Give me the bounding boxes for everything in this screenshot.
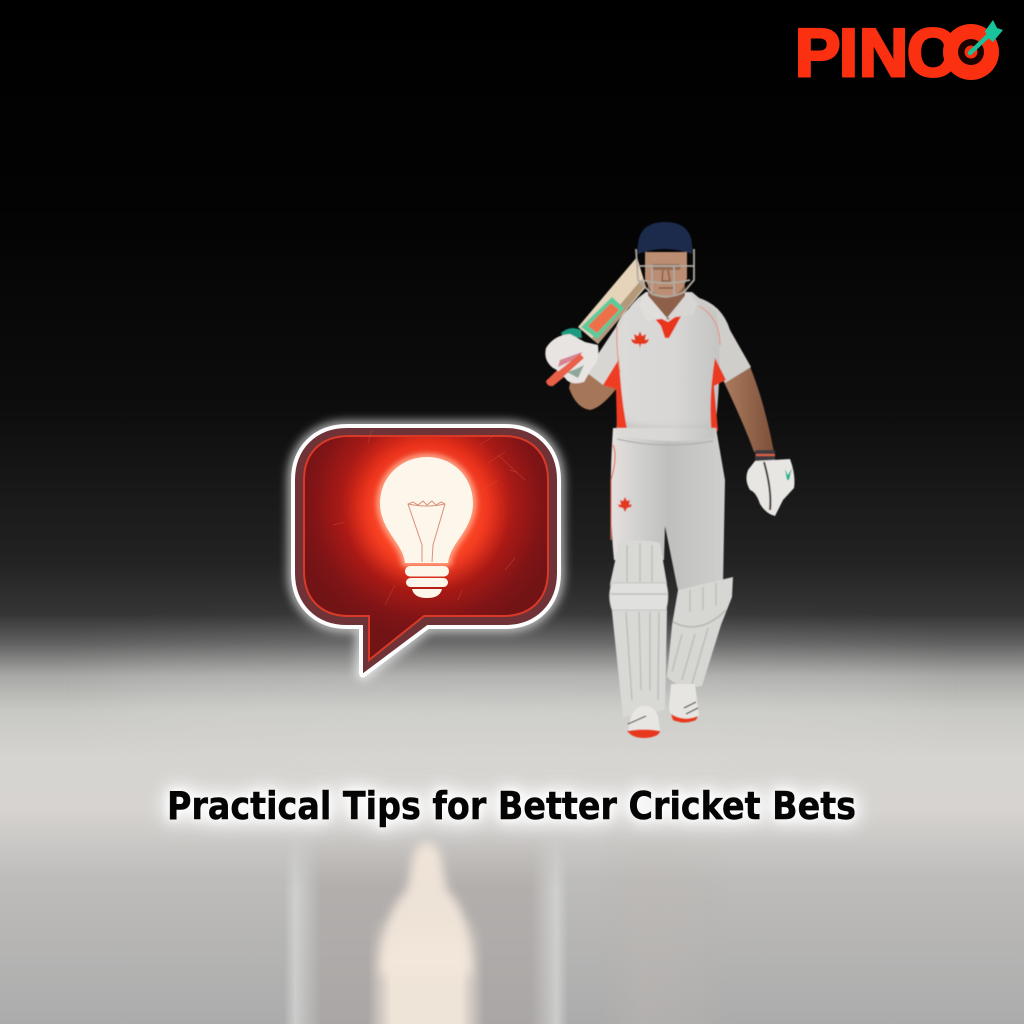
glove [746,459,794,516]
bat handle [546,348,590,386]
player back arm [569,368,620,410]
bubble inner red panel [304,436,548,660]
waistband [617,439,713,445]
shirt hem shadow [620,420,712,438]
player right arm [722,364,774,452]
logo target O [943,24,999,80]
player shirt [586,285,751,441]
right batting pad [667,577,733,687]
player neck [648,285,685,320]
bulb hot edge [380,457,473,563]
white collar [639,292,697,321]
bubble outer glow [293,426,559,676]
reflection: light bulb body [371,928,481,1024]
right shoe [669,684,699,722]
right sleeve [696,297,751,383]
bulb filament [408,501,445,562]
player right glove [746,450,794,516]
left batting pad [610,540,668,717]
light bulb [380,457,473,598]
cricket bat [546,257,646,386]
bat sticker [581,297,624,339]
reflection: player [600,832,730,1024]
scratch details [333,430,525,605]
left shoe [627,706,660,738]
wrist band [755,450,775,462]
cricket player [545,222,794,738]
eye shadow [651,264,681,270]
pad knee roll [610,583,668,610]
player head and helmet [636,222,694,298]
floor centre highlight [92,645,932,735]
logo: PINCO [795,15,1003,91]
shirt piping [617,306,720,372]
red side panels [603,359,628,434]
mouth and nose shade [659,270,673,288]
left sleeve [586,302,640,385]
bat blade [578,257,646,344]
trouser red stripe [611,445,615,540]
bulb halo [369,457,485,573]
reflection: light bulb glow top [382,842,470,975]
bat teal grip [561,328,582,338]
bubble body [293,426,559,676]
bulb glass [380,457,473,563]
pad ridges [611,543,667,700]
helmet grille [636,249,694,297]
trouser maple leaf [618,497,632,512]
reflection: speech bubble [287,860,565,1024]
shirt body [616,292,720,441]
player left glove [545,334,598,386]
logo wordmark: PINCO [795,15,997,91]
player trousers [611,428,725,597]
face [645,252,687,298]
helmet dome [638,222,692,254]
speech bubble with light bulb [293,426,559,676]
title: Practical Tips for Better Cricket Bets [167,784,856,828]
maple leaf emblem [631,331,649,348]
trousers shirt overlap [616,428,715,441]
logo arrow [970,20,1003,53]
floor reflection [287,840,565,1024]
bulb base [405,566,449,598]
red collar [650,311,684,338]
